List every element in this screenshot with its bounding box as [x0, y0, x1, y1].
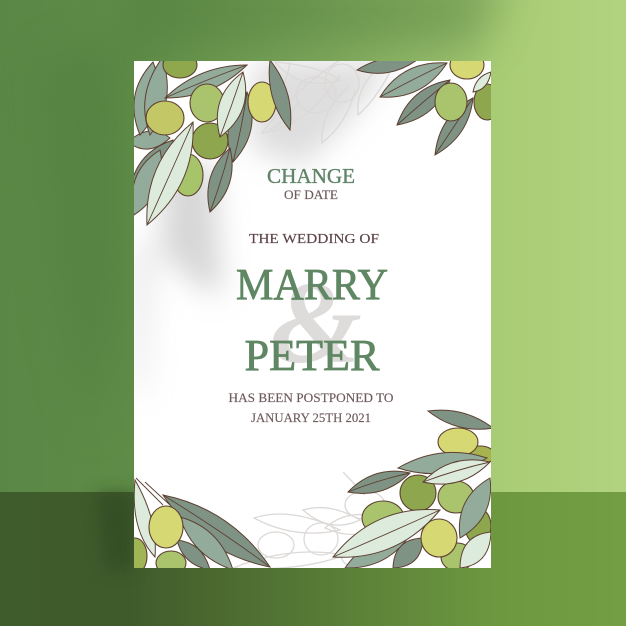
card drop shadow — [96, 492, 134, 570]
ghost foliage bottom — [233, 472, 385, 569]
olive yellow — [421, 519, 457, 557]
olive — [190, 84, 224, 122]
olive yellow — [248, 82, 276, 122]
heading: change: CHANGE — [267, 164, 355, 188]
olive — [192, 123, 228, 159]
olive — [361, 500, 403, 528]
olive — [438, 428, 478, 456]
name: peter: PETER — [244, 331, 380, 380]
wall shadow of foliage — [40, 0, 510, 440]
foliage: bottom-left branch — [134, 478, 271, 568]
olive — [435, 83, 467, 121]
olive — [400, 475, 436, 511]
card foliage shadow — [134, 61, 395, 390]
olive — [449, 61, 485, 80]
ghost foliage top — [262, 60, 395, 143]
olive — [438, 481, 474, 513]
subheading: of date: OF DATE — [284, 188, 338, 202]
text: postponed: HAS BEEN POSTPONED TO — [228, 391, 394, 405]
foliage: top-left branch — [128, 52, 291, 225]
panel: invitation card — [123, 51, 500, 575]
background floor — [0, 492, 626, 626]
olive — [466, 511, 491, 540]
text: the wedding of: THE WEDDING OF — [249, 231, 380, 246]
name: marry: MARRY — [236, 260, 388, 309]
foliage: bottom-right branch — [333, 410, 495, 571]
pale leaf — [217, 72, 246, 137]
dark leaf — [269, 60, 291, 130]
leaves back — [128, 131, 170, 149]
long pale leaf — [333, 510, 440, 557]
olive top — [162, 61, 198, 78]
ampersand: & — [270, 257, 362, 388]
olive yellow — [149, 506, 183, 548]
background wall — [0, 0, 626, 492]
pale leaf — [134, 480, 155, 557]
olive — [146, 101, 184, 135]
foliage: top-right branch — [356, 61, 491, 156]
olive — [134, 538, 148, 568]
text: new date: JANUARY 25TH 2021 — [251, 411, 371, 425]
olive — [470, 446, 491, 462]
olive — [178, 154, 204, 196]
olive — [156, 550, 186, 568]
olive — [473, 84, 491, 120]
olive — [440, 542, 470, 568]
long pale leaf — [147, 122, 193, 225]
